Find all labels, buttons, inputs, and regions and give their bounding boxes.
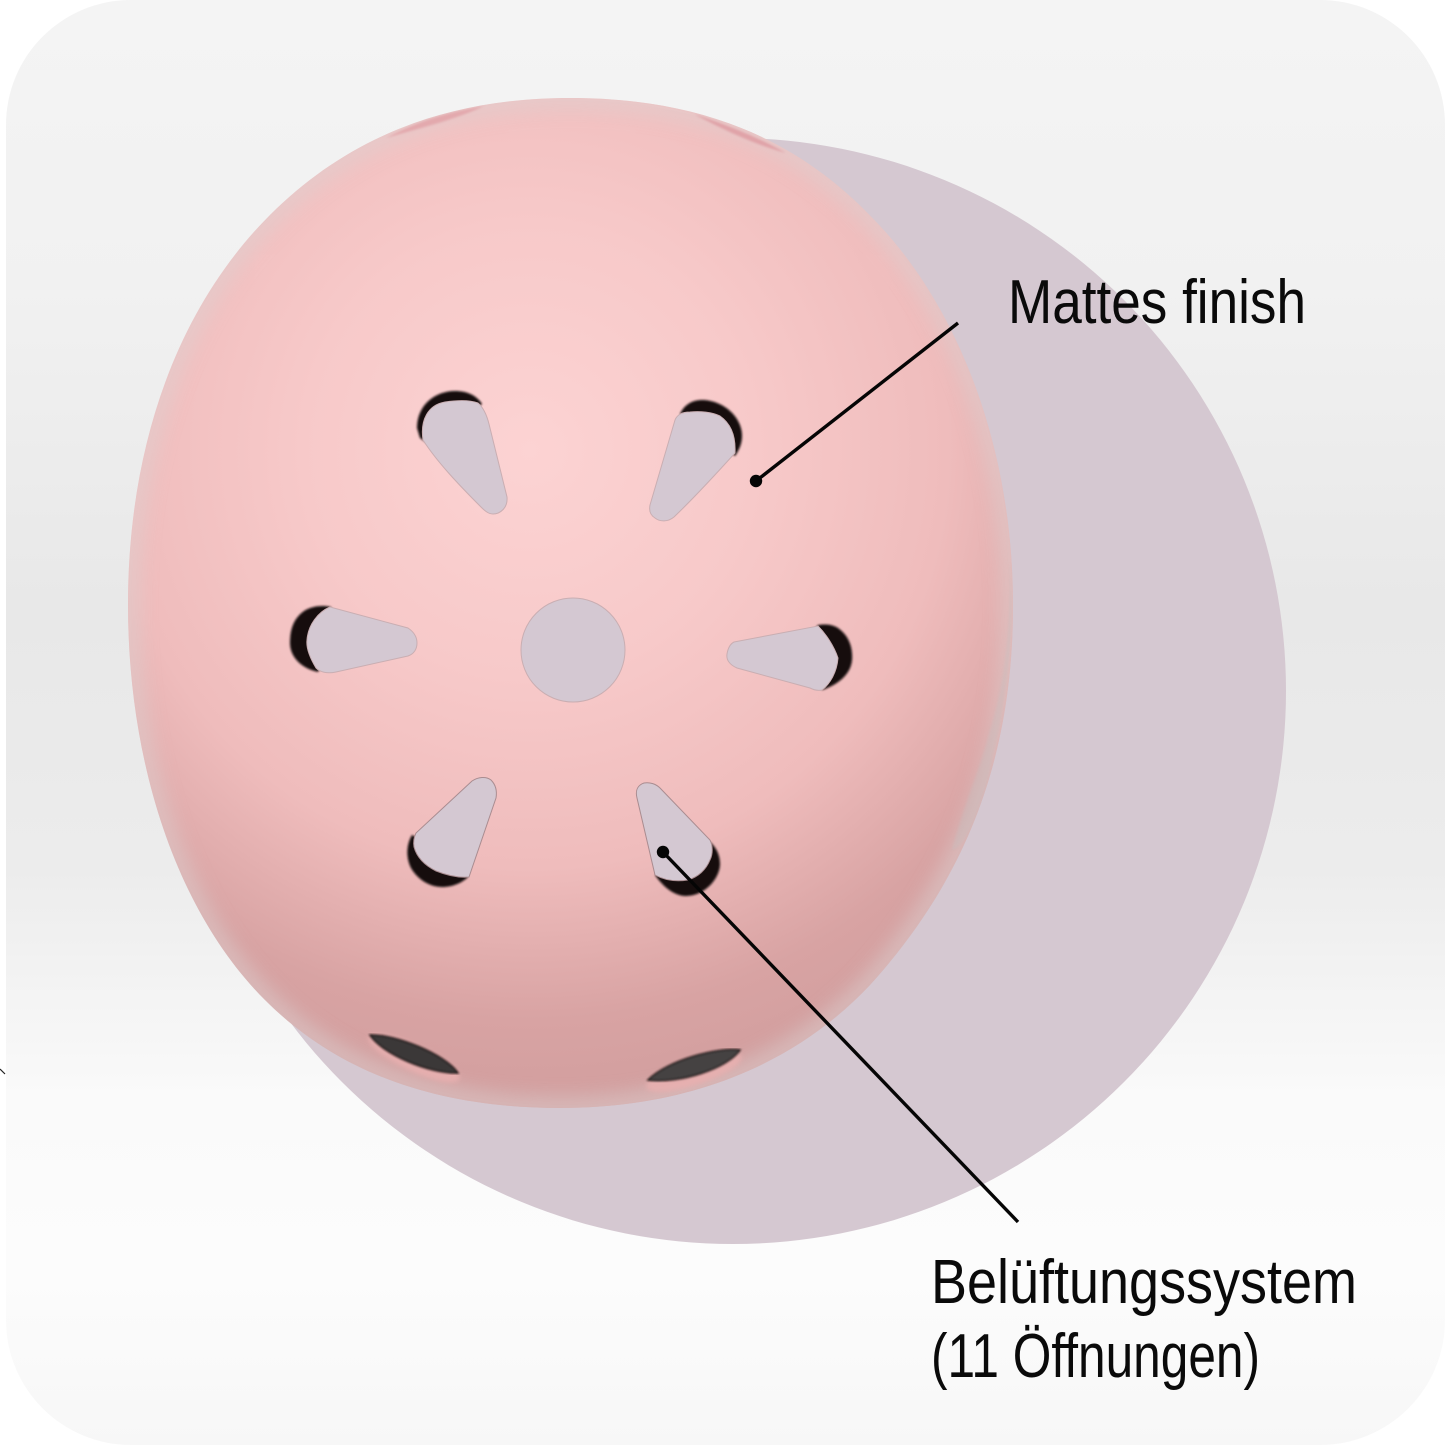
- purple circle backdrop: [180, 138, 1286, 1244]
- lower vent: left: [363, 1025, 465, 1091]
- side sticker detail: [970, 632, 1010, 808]
- top vent slit left: [390, 106, 481, 137]
- top vent slit right: [694, 114, 786, 153]
- vent: right: [727, 624, 852, 690]
- label: Belüftungssystem (11 Öffnungen): (11 Öffnungen): [931, 1322, 1260, 1391]
- vent: bottom left: [407, 777, 496, 887]
- vent: left: [290, 606, 417, 673]
- callout line: Belüftungssystem: [657, 846, 1018, 1222]
- label: Belüftungssystem (11 Öffnungen): Belüftungssystem: [931, 1248, 1357, 1317]
- label: Belüftungssystem (11 Öffnungen): [931, 1248, 1357, 1391]
- callout line: Mattes finish: [750, 323, 958, 487]
- shell edge shading: [128, 98, 1013, 1108]
- vent: top right: [650, 400, 742, 521]
- helmet shell: [128, 98, 1013, 1108]
- vent: bottom right: [636, 783, 720, 896]
- vent: centre: [521, 598, 625, 702]
- lower vent: right: [642, 1044, 746, 1100]
- stray corner mark: [0, 1069, 5, 1074]
- helmet: [128, 98, 1013, 1108]
- label: Mattes finish: Mattes finish: [1008, 268, 1306, 337]
- vent: top left: [417, 391, 507, 514]
